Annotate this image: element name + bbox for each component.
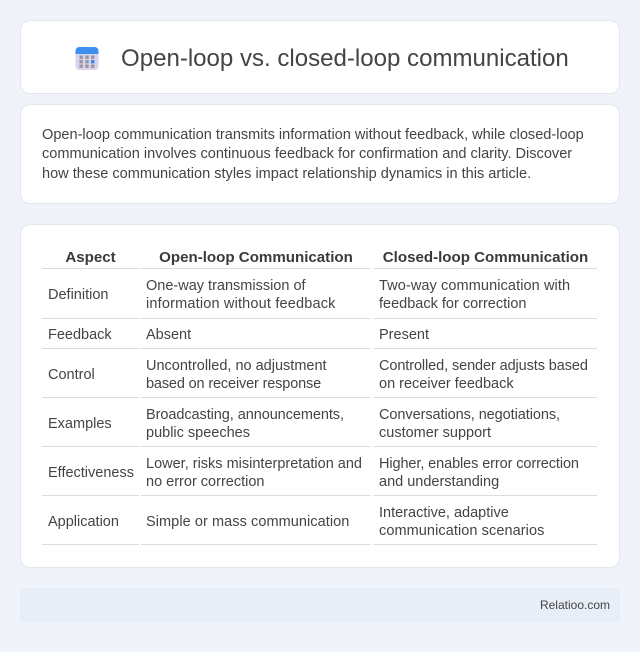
row: control: Controlled, sender adjusts based	[379, 358, 588, 374]
row: application	[48, 505, 544, 539]
row: control: Uncontrolled, no adjustment	[146, 358, 327, 374]
row: control: based on receiver response	[146, 376, 321, 392]
panel: comparison table	[20, 224, 620, 568]
row: effectiveness: no error correction	[146, 474, 264, 490]
row: examples: customer support	[379, 425, 491, 441]
row: definition: Two-way communication with	[379, 278, 570, 294]
row: effectiveness: Effectiveness	[48, 465, 134, 481]
row: effectiveness	[48, 456, 579, 490]
row: examples	[48, 407, 560, 441]
footer bar	[20, 588, 620, 622]
row: control: Control	[48, 367, 95, 383]
row: effectiveness: Lower, risks misinterpretation and	[146, 456, 362, 472]
panel: header	[20, 20, 620, 94]
table header: Aspect	[65, 248, 116, 266]
row: definition: information without feedback	[146, 296, 336, 312]
row: application: Application	[48, 514, 119, 530]
text: introduction: communication involves continuous feedback for confirmation and clarity. Discover	[42, 146, 572, 162]
row: definition: Definition	[48, 287, 108, 303]
row: effectiveness: and understanding	[379, 474, 499, 490]
table header: Closed-loop Communication	[383, 248, 588, 266]
row: examples: Broadcasting, announcements,	[146, 407, 344, 423]
row: examples: Conversations, negotiations,	[379, 407, 560, 423]
row: definition	[48, 278, 570, 312]
title: Open-loop vs. closed-loop communication	[121, 45, 569, 72]
row: feedback: Present	[379, 327, 429, 343]
row: application: Interactive, adaptive	[379, 505, 509, 521]
text: introduction	[42, 126, 584, 182]
text: introduction: how these communication styles impact relationship dynamics in this article.	[42, 166, 531, 182]
row: application: Simple or mass communication	[146, 514, 349, 530]
row: effectiveness: Higher, enables error correction	[379, 456, 579, 472]
row: feedback	[48, 327, 429, 343]
row: definition: One-way transmission of	[146, 278, 306, 294]
row: control	[48, 358, 588, 392]
row: control: on receiver feedback	[379, 376, 514, 392]
row: feedback: Absent	[146, 327, 191, 343]
footer credit: Relatioo.com	[540, 598, 610, 612]
text: introduction: Open-loop communication transmits information without feedback, while closed-loop	[42, 126, 584, 142]
row: application: communication scenarios	[379, 523, 544, 539]
row: feedback: Feedback	[48, 327, 112, 343]
panel: introduction	[20, 104, 620, 204]
row: examples: Examples	[48, 416, 112, 432]
table header: Open-loop Communication	[159, 248, 353, 266]
table header	[65, 248, 588, 266]
row: examples: public speeches	[146, 425, 250, 441]
row: definition: feedback for correction	[379, 296, 526, 312]
icon: calendar	[76, 47, 98, 70]
